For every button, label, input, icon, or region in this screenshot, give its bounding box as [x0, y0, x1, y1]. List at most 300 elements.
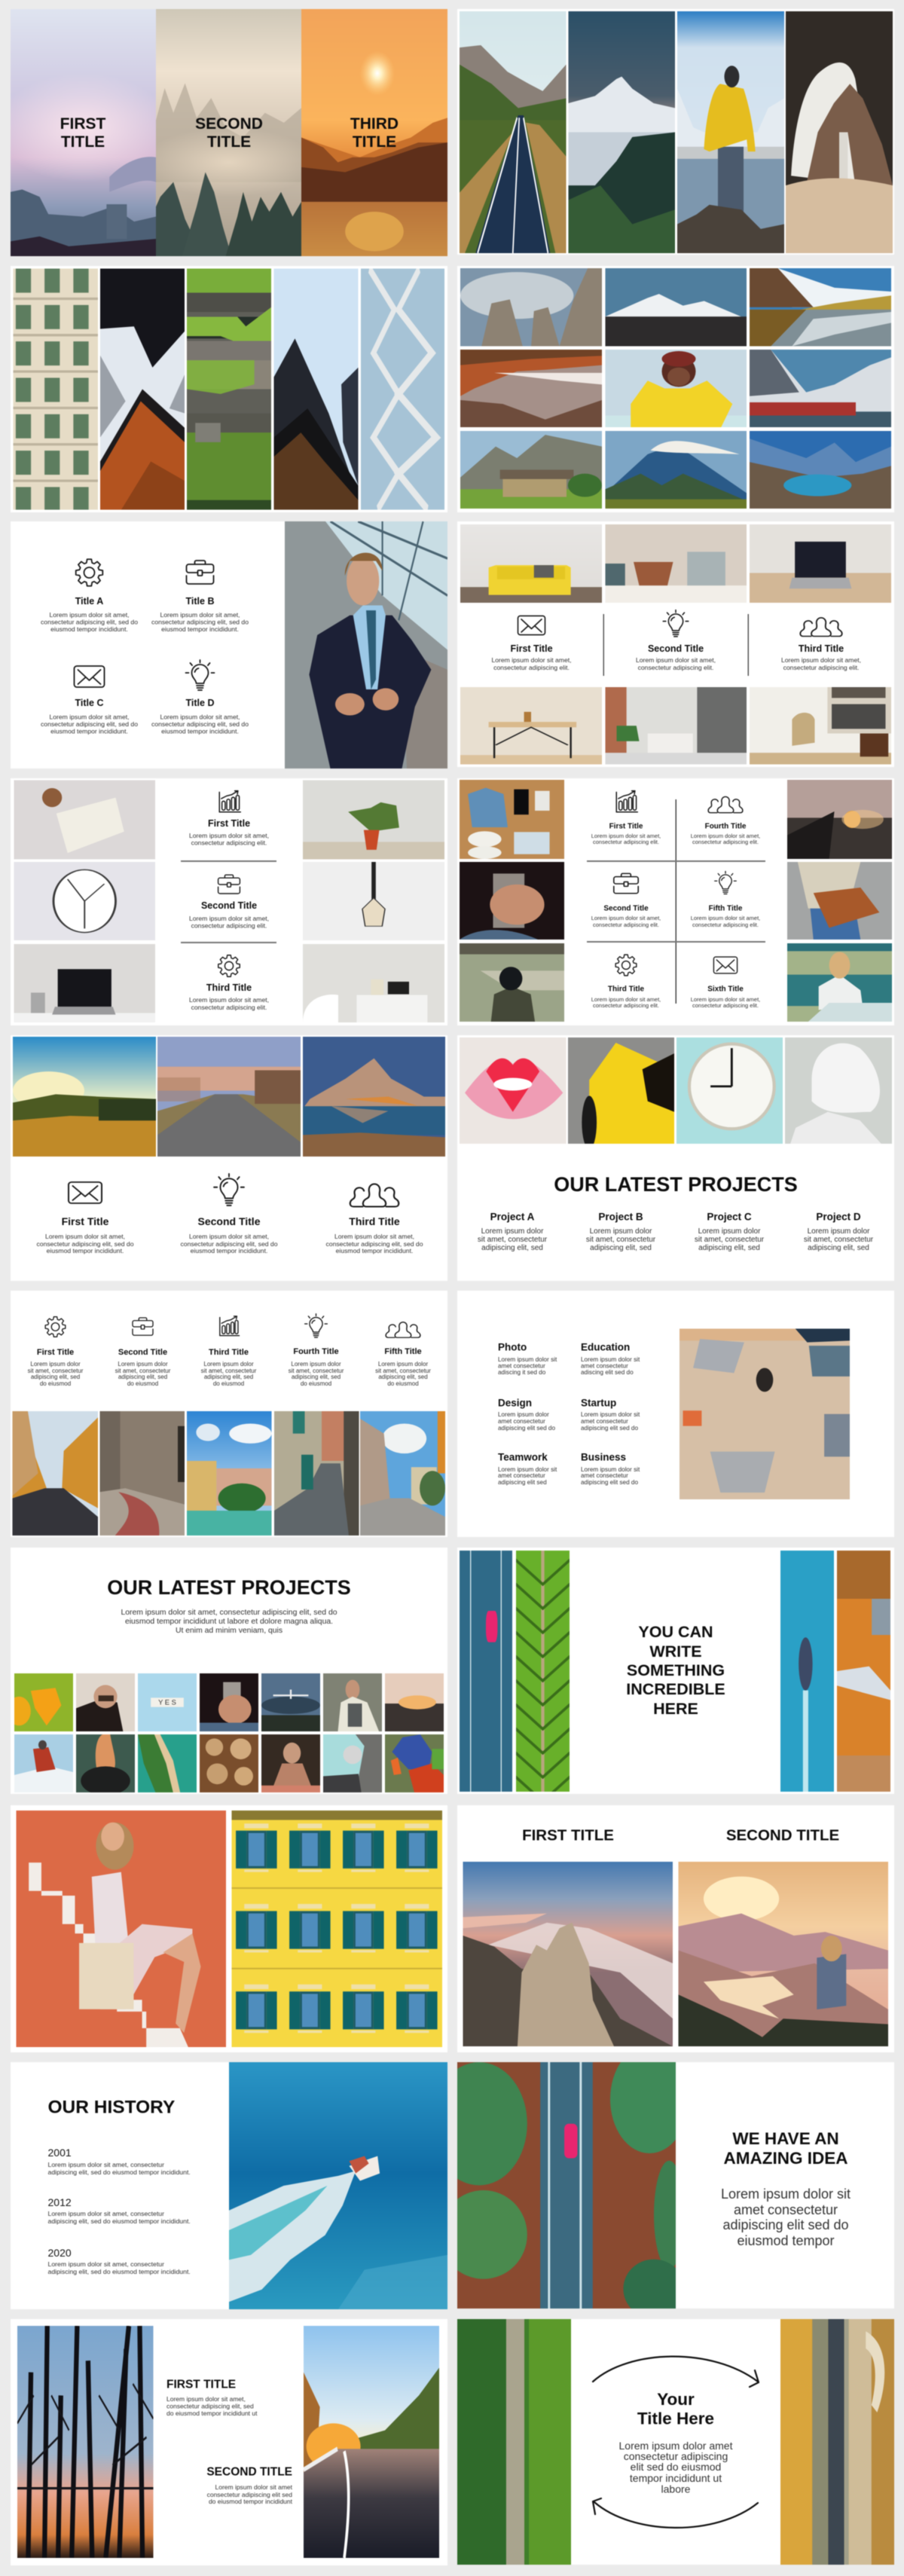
body Education: amet consectetur [581, 1362, 628, 1369]
text: Project B: Project B [598, 1212, 643, 1222]
photo: yes tiles [138, 1673, 197, 1731]
arrow: top arc [593, 2357, 759, 2387]
photo: rock pillars [460, 267, 603, 347]
year 2012: 2012 [48, 2196, 72, 2208]
body 1: Lorem ipsum dolor sit amet, [491, 656, 572, 664]
body 2: consectetur adipiscing elit, sed do [181, 1240, 278, 1248]
body 1: consectetur adipiscing elit. [493, 664, 570, 671]
photo: blue cone mountain [604, 430, 747, 509]
body 3: consectetur adipiscing elit. [783, 664, 859, 671]
icon: bulb [305, 1314, 327, 1337]
body 3: Lorem ipsum dolor sit amet, [591, 996, 661, 1002]
body 2: Lorem ipsum dolor sit amet, [189, 1233, 269, 1240]
headline: YOU CAN [638, 1623, 713, 1641]
slide 7: center column between photos [11, 778, 447, 1025]
icon: bulb [715, 871, 736, 894]
body 2: consectetur adipiscing elit sed [207, 2491, 292, 2498]
photo: yellow car [568, 1037, 674, 1149]
text: Third Title: Third Title [608, 985, 645, 993]
photo: skyscrapers up [99, 268, 185, 511]
headline: WRITE [649, 1642, 702, 1661]
body Startup: amet consectetur [581, 1418, 628, 1424]
body 4: adipiscing elit, sed [292, 1373, 341, 1380]
body Photo: amet consectetur [498, 1362, 545, 1369]
text: Third Title: Third Title [799, 643, 844, 654]
slide 5: four icons with portrait [11, 521, 447, 769]
body C: Lorem ipsum dolor sit amet, [49, 713, 130, 720]
body text: Lorem ipsum dolor amet [619, 2440, 733, 2452]
photo: sunny street [360, 1411, 445, 1536]
body 1: consectetur adipiscing elit, sed [166, 2402, 254, 2409]
photo: green coast [138, 1734, 197, 1792]
title: FIRST TITLE: TITLE [61, 133, 105, 151]
photo: foggy forest [155, 9, 302, 257]
photo: mountain road [459, 11, 567, 254]
text: First Title: First Title [208, 818, 250, 829]
text: Fifth Title: Fifth Title [709, 904, 743, 913]
text: Teamwork: Teamwork [498, 1451, 548, 1463]
photo: green path aerial [457, 2319, 571, 2565]
body 3: sit amet, consectetur [201, 1367, 257, 1374]
icon: envelope [74, 666, 104, 687]
icon: people [800, 618, 842, 636]
body 2001: Lorem ipsum dolor sit amet, consectetur [48, 2161, 164, 2168]
body B: sit amet, consectetur [586, 1236, 656, 1243]
body text: amet consectetur [734, 2202, 838, 2217]
photo: yellow sofa [460, 524, 603, 604]
body 6: consectetur adipiscing elit. [692, 1002, 759, 1008]
slide 14: you can write something incredible [457, 1548, 894, 1801]
body 2: eiusmod tempor incididunt. [191, 1247, 267, 1254]
icon: bulb [214, 1174, 244, 1205]
photo: stone stairs [274, 1411, 359, 1536]
text: Project C: Project C [707, 1212, 752, 1222]
photo: vintage woman [261, 1734, 320, 1792]
intro text: Lorem ipsum dolor sit amet, consectetur adipiscing elit, sed do [121, 1608, 337, 1617]
title: FIRST TITLE: FIRST [60, 115, 105, 133]
body 1: consectetur adipiscing elit. [593, 838, 659, 845]
body Photo: adiscing it sed do [498, 1368, 546, 1376]
title: SECOND TITLE: TITLE [207, 133, 251, 151]
text: Title B: Title B [186, 596, 214, 607]
body 2001: adipiscing elit, sed do eiusmod tempor incididunt. [48, 2168, 191, 2176]
body text: tempor incididunt ut [630, 2472, 722, 2484]
body 5: consectetur adipiscing elit. [692, 921, 759, 928]
photo: laptop brick wall [14, 943, 155, 1022]
photo: parrot [385, 1734, 444, 1792]
body 4: do eiusmod [301, 1380, 331, 1386]
text: First Title: First Title [609, 823, 643, 830]
body 4: Lorem ipsum dolor sit amet, [691, 832, 760, 839]
photo: wine man [323, 1673, 382, 1731]
title: FIRST TITLE: FIRST TITLE [522, 1826, 614, 1844]
icon: bulb [663, 610, 689, 637]
slide 11: five icons over street photos [11, 1291, 447, 1537]
icon: gear [615, 955, 637, 976]
photo: mug [200, 1673, 258, 1731]
title: SECOND TITLE: SECOND TITLE [206, 2465, 292, 2479]
body 1: consectetur adipiscing elit, sed do [37, 1240, 134, 1248]
icon: people [350, 1184, 399, 1207]
body 2: consectetur adipiscing elit. [593, 921, 659, 928]
photo: forest road [431, 2045, 689, 2318]
body 3: do eiusmod [213, 1380, 244, 1386]
text: Sixth Title: Sixth Title [707, 985, 744, 993]
body 2: Lorem ipsum dolor sit amet [215, 2483, 293, 2491]
text: Third Title: Third Title [206, 982, 252, 993]
photo: glass lattice [360, 268, 444, 510]
body 1: Lorem ipsum dolor sit amet, [189, 832, 269, 839]
text: First Title: First Title [62, 1215, 109, 1227]
slide 8: six item grid between photos [457, 778, 894, 1025]
text: First Title: First Title [510, 643, 553, 654]
photo: white hair [785, 1037, 892, 1144]
icon: envelope [518, 616, 545, 635]
photo: green terraces [186, 268, 272, 511]
body Business: adipiscing elit sed do [581, 1478, 638, 1486]
photo: sunset glasses [786, 779, 893, 860]
body Education: Lorem ipsum dolor sit [581, 1356, 640, 1362]
photo: speedboat wake [229, 2062, 447, 2309]
text: Project A: Project A [490, 1212, 535, 1222]
body 2: Lorem ipsum dolor sit amet, [189, 915, 269, 922]
headline: SOMETHING [627, 1661, 725, 1679]
intro text: eiusmod tempor incididunt ut labore et dolore magna aliqua. [125, 1617, 333, 1626]
body 2: Lorem ipsum dolor sit amet, [591, 915, 661, 921]
slide 17: our history timeline [11, 2062, 447, 2309]
title: Your Title Here: Your [657, 2390, 695, 2408]
photo: yellow shuttered building [232, 1811, 442, 2047]
text: Second Title: Second Title [603, 904, 649, 913]
photo: burnt trees at dusk [17, 2326, 154, 2558]
body 2012: Lorem ipsum dolor sit amet, consectetur [48, 2210, 164, 2217]
photo: woman yellow coat [605, 350, 747, 428]
body 3: Lorem ipsum dolor sit amet, [189, 996, 269, 1004]
body 5: adipiscing elit, sed [378, 1373, 428, 1380]
year 2020: 2020 [48, 2247, 72, 2259]
icon: briefcase [218, 875, 240, 894]
text: Design: Design [498, 1397, 532, 1409]
photo: upside down woman [76, 1673, 135, 1731]
photo: mountain lake [303, 1037, 445, 1157]
body 4: sit amet, consectetur [289, 1367, 344, 1374]
slide 10: our latest projects with four photos [457, 1035, 894, 1281]
photo: stone alley [99, 1411, 185, 1536]
photo: alpine hut [460, 431, 603, 509]
body Design: amet consectetur [498, 1418, 545, 1424]
body 1: do eiusmod tempor incididunt ut [166, 2409, 258, 2417]
photo: snow skier [14, 1734, 73, 1792]
text: Second Title: Second Title [118, 1348, 167, 1357]
body text: consectetur adipiscing [624, 2450, 728, 2462]
body D: sit amet, consectetur [804, 1236, 874, 1243]
icon: people [386, 1322, 420, 1337]
body Teamwork: amet consectetur [498, 1472, 545, 1478]
photo: clock on teal [676, 1037, 783, 1144]
slide 12: six categories with desk photo [457, 1291, 894, 1537]
photo: green leaf rows [516, 1551, 570, 1801]
body C: Lorem ipsum dolor [698, 1227, 761, 1236]
heading: OUR LATEST PROJECTS [107, 1576, 351, 1599]
photo: woman overlook [678, 1862, 888, 2046]
photo: desk from above [680, 1329, 850, 1499]
arrow: bottom arc [593, 2498, 758, 2528]
headline: AMAZING IDEA [723, 2149, 848, 2167]
photo: yes tiles: Y E S [158, 1699, 176, 1706]
title: FIRST TITLE: FIRST TITLE [166, 2378, 236, 2391]
photo: snow peak night [568, 11, 676, 254]
body 1: adipiscing elit, sed [31, 1373, 80, 1380]
body 1: Lorem ipsum dolor sit amet, [166, 2395, 246, 2403]
heading: OUR LATEST PROJECTS [554, 1173, 798, 1196]
body 6: Lorem ipsum dolor sit amet, [691, 996, 760, 1002]
body D: Lorem ipsum dolor sit amet, [160, 713, 240, 720]
body A: adipiscing elit, sed [481, 1243, 543, 1252]
body 1: Lorem ipsum dolor [30, 1361, 81, 1367]
title: THIRD TITLE: TITLE [353, 133, 396, 151]
icon: chart [219, 791, 240, 812]
photo: hay field [13, 1037, 156, 1157]
icon: envelope [69, 1182, 102, 1203]
body 5: sit amet, consectetur [375, 1367, 431, 1374]
body 2: consectetur adipiscing elit. [638, 664, 713, 671]
year 2001: 2001 [48, 2147, 72, 2159]
body A: Lorem ipsum dolor [481, 1227, 544, 1236]
photo: red huts snow [749, 349, 892, 428]
icon: chart [220, 1316, 240, 1336]
body A: consectetur adipiscing elit, sed do [41, 618, 138, 625]
photo: boat blue water [780, 1551, 834, 1792]
body text: Lorem ipsum dolor sit [721, 2186, 851, 2202]
photo: sea cave arch [785, 11, 893, 253]
photo: airplane [261, 1673, 320, 1731]
title: THIRD TITLE: THIRD [350, 115, 399, 133]
text: Second Title: Second Title [648, 643, 704, 654]
text: Title D: Title D [186, 698, 214, 708]
slide 20: your title here with cycle arrows [457, 2319, 894, 2565]
photo: gold field road aerial [780, 2319, 894, 2565]
body 5: Lorem ipsum dolor [378, 1361, 428, 1367]
photo: hands holding mug [459, 861, 565, 940]
photo: logs [200, 1734, 258, 1792]
slide 19: two titles with tall photos [11, 2319, 447, 2565]
slide 4: nine photo grid [457, 266, 894, 512]
text: Third Title: Third Title [209, 1348, 249, 1357]
body C: eiusmod tempor incididunt. [50, 728, 128, 735]
slide 15: woman and yellow facade [11, 1805, 447, 2052]
body 3: consectetur adipiscing elit. [191, 1004, 267, 1011]
photo: book and coffee [14, 780, 155, 860]
icon: light bulb [185, 660, 214, 690]
body Business: amet consectetur [581, 1472, 628, 1478]
body 2: sit amet, consectetur [115, 1367, 171, 1374]
text: First Title: First Title [37, 1348, 74, 1357]
photo: living room [604, 686, 747, 765]
body 2: consectetur adipiscing elit. [191, 922, 267, 930]
text: Fourth Title: Fourth Title [293, 1347, 339, 1356]
headline: WE HAVE AN [732, 2129, 839, 2147]
body 3: consectetur adipiscing elit. [593, 1002, 659, 1008]
photo: hanging lamp [303, 861, 444, 940]
body 2: adipiscing elit, sed [118, 1373, 167, 1380]
icon: gear [45, 1317, 66, 1337]
body 2: Lorem ipsum dolor [118, 1361, 168, 1367]
body 1: Lorem ipsum dolor sit amet, [591, 832, 661, 839]
title: Your Title Here: Title Here [637, 2409, 714, 2428]
body 2012: adipiscing elit, sed do eiusmod tempor incididunt. [48, 2217, 191, 2225]
body 3: eiusmod tempor incididunt. [336, 1247, 413, 1254]
body 3: consectetur adipiscing elit, sed do [326, 1240, 423, 1248]
body 2020: Lorem ipsum dolor sit amet, consectetur [48, 2260, 164, 2268]
photo: orange sunset [301, 8, 448, 257]
slide 18: amazing idea [431, 2045, 894, 2318]
photo: cream facade [13, 268, 98, 511]
title: SECOND TITLE: SECOND TITLE [726, 1826, 839, 1844]
photo: bookshelf chair [749, 686, 892, 765]
icon: people [708, 796, 743, 813]
body Teamwork: Lorem ipsum dolor sit [498, 1466, 557, 1472]
photo: stacked bowls [604, 524, 747, 603]
photo: wall clock [14, 862, 155, 940]
body Business: Lorem ipsum dolor sit [581, 1466, 640, 1472]
body C: sit amet, consectetur [695, 1236, 765, 1243]
photo: country road [157, 1037, 301, 1157]
slide 6: interiors with three titles [457, 521, 894, 767]
slide 13: latest projects with thumbnail grid [8, 1548, 447, 1795]
headline: INCREDIBLE [626, 1680, 725, 1698]
photo: lake reflection [749, 267, 892, 347]
text: Education: Education [581, 1341, 630, 1353]
body B: Lorem ipsum dolor sit amet, [160, 611, 240, 619]
body Design: Lorem ipsum dolor [498, 1410, 549, 1418]
photo: sunset glasses [385, 1673, 444, 1731]
photo: lavender harbor [10, 9, 157, 257]
photo: red lips [460, 1037, 567, 1144]
body 3: Lorem ipsum dolor [203, 1361, 254, 1367]
body text: eiusmod tempor [737, 2233, 835, 2248]
text: Business: Business [581, 1451, 626, 1463]
photo: laptop desk [749, 524, 892, 604]
body 1: consectetur adipiscing elit. [191, 839, 267, 847]
photo: plant [303, 780, 444, 860]
body B: adipiscing elit, sed [590, 1243, 652, 1252]
body 4: consectetur adipiscing elit. [692, 838, 759, 845]
photo: beanie back view [459, 943, 565, 1022]
slide 3: five architecture strips [11, 266, 447, 512]
text: Startup: Startup [581, 1397, 616, 1409]
body B: eiusmod tempor incididunt. [161, 625, 239, 633]
text: Photo: Photo [498, 1341, 527, 1353]
photo: vintage car [323, 1734, 382, 1792]
icon: envelope [713, 957, 738, 973]
photo: white cabinet [303, 943, 444, 1023]
body 2020: adipiscing elit, sed do eiusmod tempor incididunt. [48, 2268, 191, 2275]
body Startup: adipiscing elit sed do [581, 1424, 638, 1432]
photo: dark tower sky [273, 268, 359, 511]
photo: leather bag [786, 862, 892, 940]
body D: eiusmod tempor incididunt. [161, 728, 239, 735]
text: Title A: Title A [75, 596, 103, 607]
body Photo: Lorem ipsum dolor sit [498, 1356, 557, 1362]
body 5: do eiusmod [387, 1380, 419, 1386]
text: Fifth Title: Fifth Title [384, 1347, 422, 1356]
photo: golden street [12, 1411, 98, 1536]
body D: Lorem ipsum dolor [808, 1227, 870, 1236]
body Design: adipiscing elit sed do [498, 1424, 555, 1432]
body Education: adiscing elit sed do [581, 1368, 634, 1376]
headline: HERE [653, 1700, 698, 1718]
body B: Lorem ipsum dolor [590, 1227, 652, 1236]
body 1: eiusmod tempor incididunt. [47, 1247, 124, 1254]
body 1: sit amet, consectetur [28, 1367, 84, 1374]
photo: woman in convertible [786, 943, 893, 1022]
slide 1: three titled panels [0, 9, 447, 256]
body 3: adipiscing elit, sed [204, 1373, 253, 1380]
body 2: Lorem ipsum dolor sit amet, [636, 656, 716, 664]
photo: peaks over clouds [463, 1862, 673, 2046]
body 1: Lorem ipsum dolor sit amet, [45, 1233, 125, 1240]
body 4: Lorem ipsum dolor [291, 1361, 341, 1367]
icon: briefcase [614, 873, 638, 894]
photo: snow volcano [604, 267, 747, 347]
photo: turquoise tarn [749, 430, 892, 509]
photo: woman on orange stairs [17, 1811, 226, 2047]
photo: canyon arch [460, 349, 603, 428]
slide 2: four tall landscape strips [457, 9, 894, 255]
body Startup: Lorem ipsum dolor sit [581, 1410, 640, 1418]
photo: wood console [460, 687, 603, 765]
body 2: do eiusmod tempor incididunt [209, 2498, 293, 2505]
body text: elit sed do eiusmod [631, 2461, 721, 2473]
body 1: do eiusmod [40, 1380, 71, 1386]
body D: consectetur adipiscing elit, sed do [151, 720, 249, 728]
text: Fourth Title: Fourth Title [705, 823, 747, 830]
body 3: Lorem ipsum dolor sit amet, [334, 1233, 414, 1240]
body text: adipiscing elit sed do [722, 2217, 849, 2232]
text: Second Title: Second Title [198, 1215, 261, 1227]
photo: venice canal [187, 1411, 271, 1536]
body D: adipiscing elit, sed [808, 1243, 869, 1252]
body Teamwork: adipiscing elit sed [498, 1478, 547, 1486]
icon: briefcase [133, 1318, 153, 1335]
body C: consectetur adipiscing elit, sed do [41, 720, 138, 728]
body A: eiusmod tempor incididunt. [50, 625, 128, 633]
icon: briefcase [187, 561, 214, 584]
body B: consectetur adipiscing elit, sed do [151, 618, 249, 625]
icon: gear [218, 955, 240, 976]
photo: hiker yellow jacket [676, 11, 785, 254]
photo: flat lay shirt [459, 779, 565, 860]
icon: chart [616, 791, 637, 812]
photo: tire fire [76, 1734, 135, 1795]
icon: gear [76, 559, 102, 586]
photo: autumn trees [837, 1551, 890, 1792]
heading: OUR HISTORY [48, 2098, 175, 2117]
text: Project D: Project D [816, 1212, 861, 1222]
photo: yellow flower [8, 1673, 73, 1731]
text: Title C: Title C [75, 698, 103, 708]
body 5: Lorem ipsum dolor sit amet, [691, 915, 760, 921]
title: SECOND TITLE: SECOND [195, 115, 263, 133]
body C: adipiscing elit, sed [698, 1243, 760, 1252]
body text: labore [661, 2483, 691, 2495]
photo: road to sunset [304, 2326, 439, 2558]
body 2: do eiusmod [127, 1380, 158, 1386]
slide 16: two titled sunset photos [457, 1805, 894, 2052]
slide 9: three landscapes with icons [11, 1035, 447, 1281]
text: Second Title: Second Title [201, 900, 257, 911]
photo: road and pink car [460, 1551, 512, 1792]
